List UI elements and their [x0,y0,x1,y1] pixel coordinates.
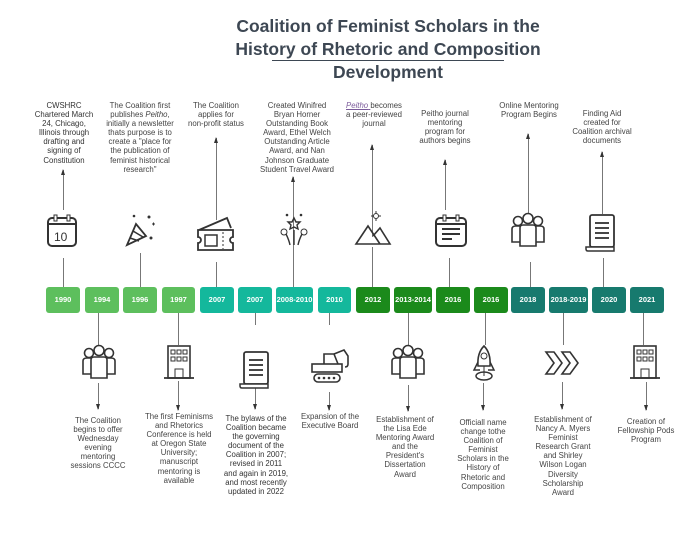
text: 2010 [326,295,343,304]
text: 1997 [170,295,187,304]
icon: excavator [311,349,349,383]
top text: 2018: Online Mentoring Program Begins [499,101,559,119]
icon: calendar 10 [47,214,77,247]
text: 2013-2014 [395,295,431,304]
top text: 2008-2010: Created Winifred Bryan Horner Outstanding Book Award, Ethel Welch Outstanding Article Award, and Nan Johnson Graduate Student Travel Award [260,101,334,174]
text: 2016 [445,295,461,304]
icon: chevrons [544,351,579,375]
text: 2012 [365,295,381,304]
title: Coalition of Feminist Scholars in the History of Rhetoric and Composition Development [235,16,541,82]
text: 1990 [55,295,71,304]
text: 2007 [247,295,263,304]
icon: ticket [197,216,234,251]
text: 2020 [601,295,617,304]
top text: 1996: The Coalition first publishes Peitho, initially a newsletter thats purpose is to create a "place for the publication of feminist historical research" [106,101,174,174]
icon: group [511,212,545,247]
top text: 2020: Finding Aid created for Coalition archival documents [572,109,632,145]
top text: 2016: Peitho journal mentoring program for authors begins [419,109,471,145]
top text: 2007: The Coalition applies for non‑profit status [188,101,244,128]
icon: group 2013 [391,344,425,379]
text: 2007 [209,295,225,304]
text: 2008-2010 [277,295,312,304]
top text: 1990: CWSHRC Chartered March 24, Chicago, Illinois through drafting and signing of Constitution [35,101,93,165]
bottom text: 2016: Officiall name change tothe Coalition of Feminist Scholars in the History of Rhetoric and Composition [457,418,509,491]
icon: building 1997 [164,345,194,379]
bottom text: 2013-2014: Establishment of the Lisa Ede Mentoring Award and the President's Dissertation Award [376,415,434,479]
bottom text: 2007: The bylaws of the Coalition became the governing document of the Coalition in 2007; revised in 2011 and again in 2019, and most recently updated in 2022 [224,414,288,496]
bottom text: 2018-2019: Establishment of Nancy A. Myers Feminist Research Grant and Shirley Wilson Logan Diversity Scholarship Award [534,415,592,497]
text: 2018 [520,295,536,304]
connector lines [61,133,648,412]
text: 1994 [94,295,110,304]
icon: mountains [354,211,392,245]
icon: building 2021 [630,345,660,379]
icon: calendar grid [435,214,467,247]
bottom text: 1994: The Coalition begins to offer Wednesday evening mentoring sessions CCCC [70,416,126,470]
icon: party popper [125,214,155,247]
bottom text: 1997: The first Feminisms and Rhetorics Conference is held at Oregon State University; manuscript mentoring is available [145,412,213,485]
icon: document 2007 [239,351,269,389]
timeline year boxes [46,287,664,313]
icon: calendar 10: 10 [54,230,68,244]
text: 2018-2019 [551,295,586,304]
top text: 2012: Peitho becomes a peer-reviewed journal [346,101,402,128]
bottom text: 2010: Expansion of the Executive Board [301,412,359,430]
icon: document [585,214,615,252]
icon: rocket [472,345,496,381]
icon: group 1994 [82,344,116,379]
icon: fireworks [280,214,308,246]
text: 2016 [483,295,499,304]
bottom text: 2021: Creation of Fellowship Pods Program [618,417,674,444]
text: 1996 [132,295,148,304]
text: 2021 [639,295,655,304]
